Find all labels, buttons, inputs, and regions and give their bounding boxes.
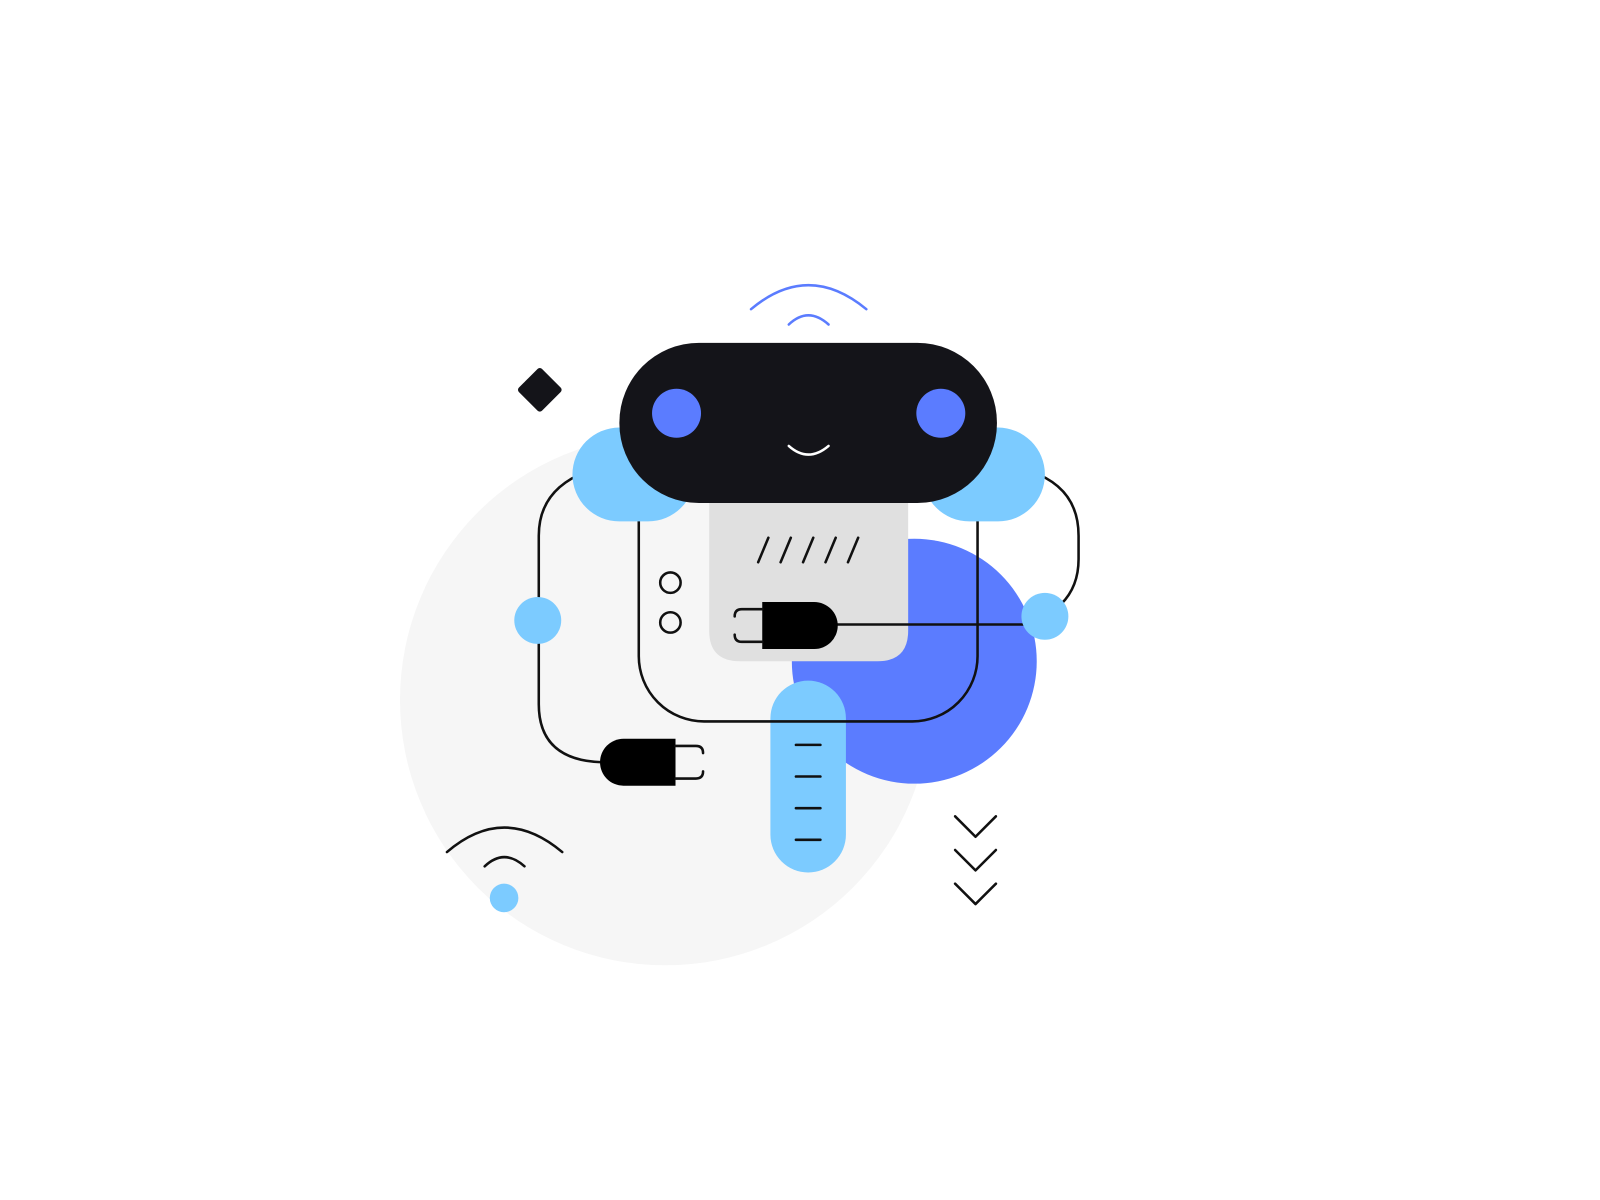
head (619, 343, 997, 503)
wire to right joint (832, 623, 1026, 626)
right arm wire (1031, 471, 1079, 604)
buttons (660, 572, 681, 633)
plug bottom-left (600, 739, 703, 786)
chevrons (955, 816, 996, 904)
shoulders (572, 428, 695, 521)
body outline (639, 449, 978, 721)
joints (514, 597, 561, 644)
wifi top (751, 285, 866, 324)
wifi bottom-left (447, 828, 562, 912)
plug in panel (735, 602, 838, 649)
diamond (517, 367, 563, 413)
blue circle (792, 539, 1037, 784)
chest panel (709, 490, 908, 661)
background circle (400, 435, 931, 965)
left arm wire (539, 471, 602, 762)
leg (770, 681, 846, 872)
slashes (758, 538, 858, 562)
